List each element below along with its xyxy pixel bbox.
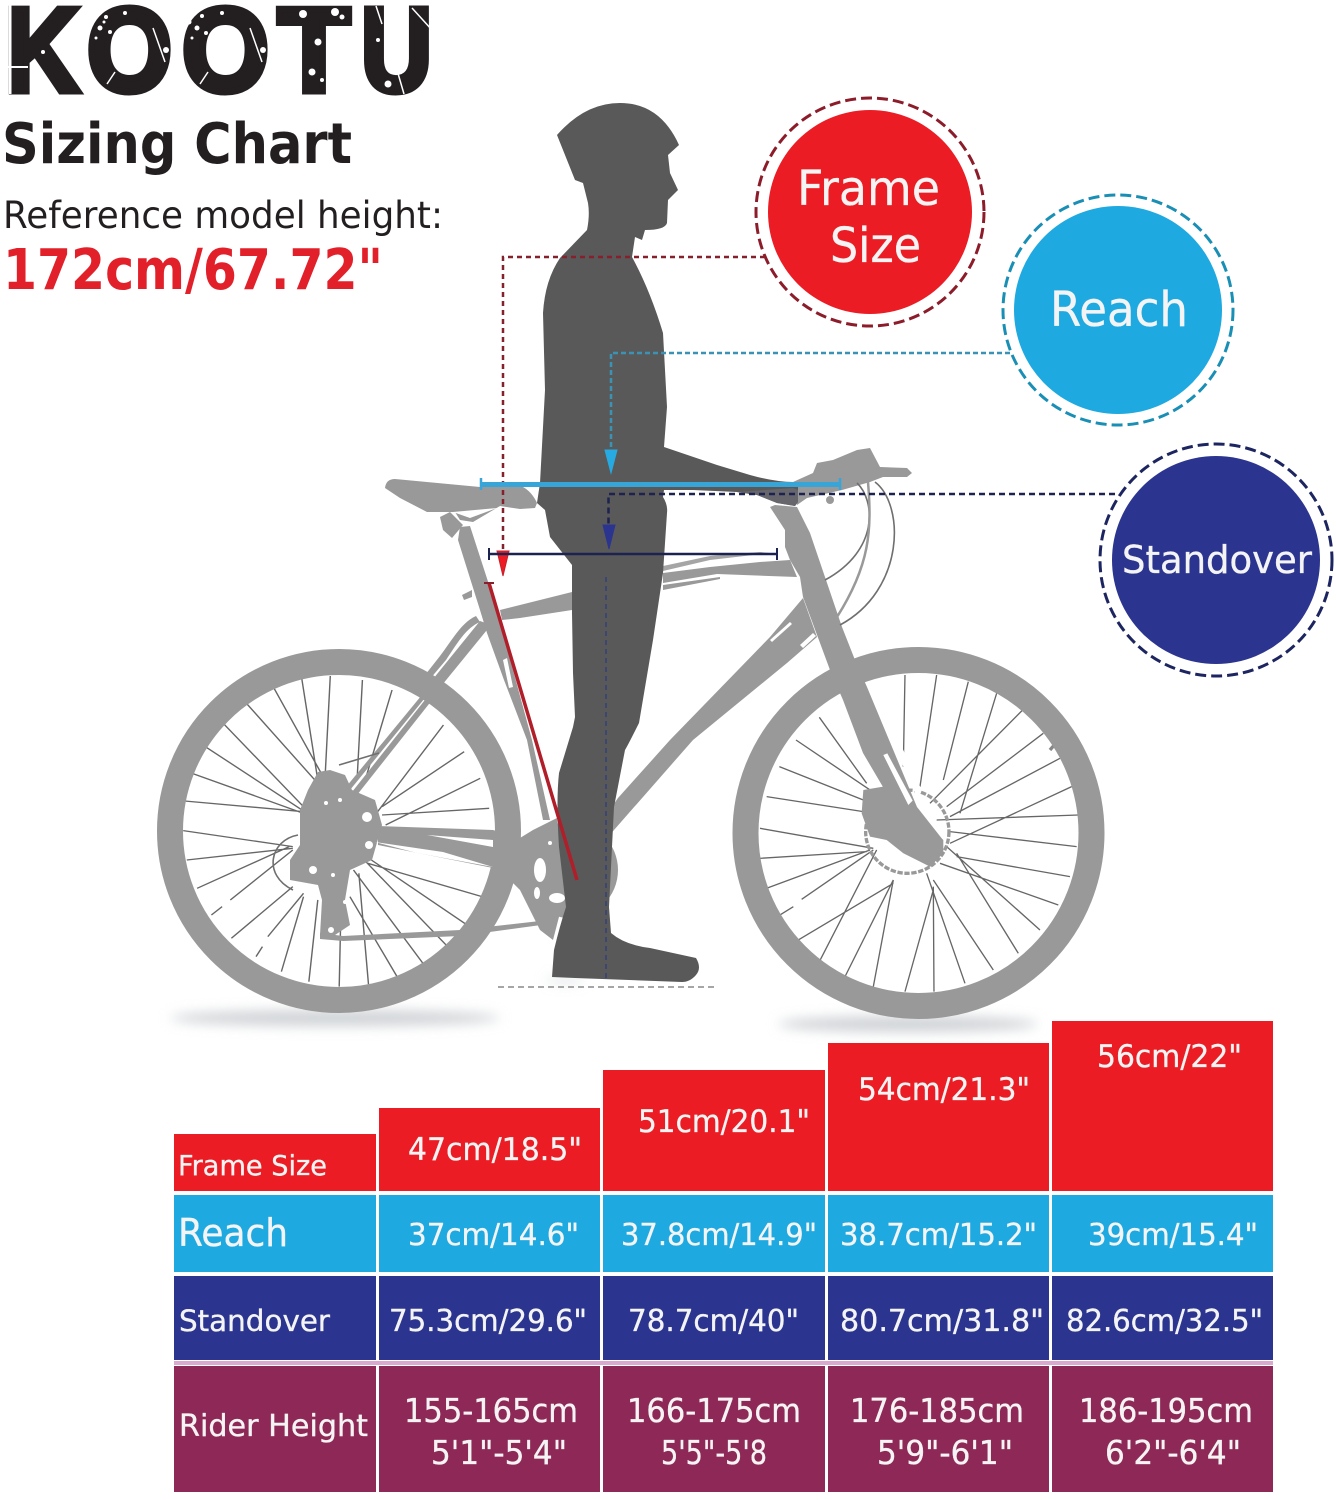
row: Standover: 82.6cm/32.5": [1066, 1304, 1263, 1339]
row: Frame Size: Frame Size: [178, 1149, 327, 1182]
badge: Reach: [1003, 195, 1233, 425]
badge: Frame Size: Frame: [797, 161, 940, 217]
row: Standover: Standover: [179, 1304, 330, 1338]
chain: [320, 921, 541, 941]
sizing table: [174, 1021, 1273, 1492]
chain stay: [378, 826, 520, 868]
row: Frame Size: [174, 1021, 1273, 1191]
row: Rider Height: [174, 1366, 1273, 1492]
row: Rider Height: 176-185cm: [850, 1391, 1024, 1430]
row: Reach: Reach: [178, 1211, 288, 1255]
text: model height value: 172cm/67.72": [3, 238, 383, 303]
row: Reach: 37cm/14.6": [408, 1218, 579, 1253]
seat tube: [458, 526, 550, 820]
row separator: [174, 1361, 1273, 1365]
row: Reach: 38.7cm/15.2": [840, 1218, 1037, 1253]
brake and gear cables: [273, 482, 894, 890]
badge: Frame Size: Size: [830, 218, 921, 274]
dimension: standover leader, arrow and bar: [489, 494, 1115, 982]
row: Rider Height: Rider Height: [179, 1409, 368, 1444]
rear wheel: [170, 662, 508, 1000]
heading: Sizing Chart: Sizing Chart: [2, 112, 352, 177]
down tube: [606, 598, 817, 840]
bike frame: [320, 448, 943, 941]
saddle: [385, 479, 537, 522]
row: Standover: [174, 1276, 1273, 1360]
rear top tube: [500, 592, 572, 620]
badge: Standover: Standover: [1122, 538, 1312, 582]
row: Rider Height: 6'2"-6'4": [1105, 1433, 1241, 1472]
row: Standover: 75.3cm/29.6": [389, 1304, 587, 1339]
badge: Standover: [1100, 444, 1332, 676]
row: Rider Height: 5'1"-5'4": [431, 1433, 567, 1472]
dimension: frame size leader and arrow: [484, 257, 765, 880]
row: Reach: 39cm/15.4": [1088, 1218, 1258, 1253]
ground shadows: [170, 978, 1038, 1032]
front wheel: [746, 660, 1092, 1006]
row: Rider Height: 5'9"-6'1": [877, 1433, 1013, 1472]
row: Reach: 37.8cm/14.9": [621, 1218, 817, 1253]
row: Frame Size: 51cm/20.1": [638, 1104, 810, 1140]
row: Standover: 80.7cm/31.8": [840, 1304, 1044, 1339]
crankset: [522, 822, 618, 918]
row: Rider Height: 155-165cm: [404, 1391, 578, 1430]
front top tube: [663, 560, 797, 583]
badge: Frame Size: [756, 98, 984, 326]
ground reference line: [498, 986, 715, 988]
row: Frame Size: 56cm/22": [1097, 1039, 1242, 1075]
dimension: reach leader, arrow and bar: [481, 353, 1010, 490]
handlebar and stem: [793, 448, 912, 505]
row: Reach: [174, 1195, 1273, 1272]
row: Rider Height: 186-195cm: [1079, 1391, 1253, 1430]
white cut-outs in frame: [375, 508, 922, 903]
brand logo: KOOTU: [4, 0, 432, 117]
row: Frame Size: 47cm/18.5": [408, 1132, 582, 1168]
person silhouette: [537, 103, 798, 982]
row: Frame Size: 54cm/21.3": [858, 1072, 1030, 1108]
bicycle illustration: [170, 448, 1092, 1006]
row: Standover: 78.7cm/40": [628, 1304, 799, 1339]
badge: Reach: Reach: [1050, 282, 1188, 338]
text: Reference model height: Reference model height:: [3, 194, 443, 237]
head tube and fork: [770, 505, 943, 867]
seat stay: [429, 621, 491, 690]
row: Rider Height: 5'5"-5'8: [661, 1433, 767, 1472]
row: Rider Height: 166-175cm: [627, 1391, 801, 1430]
